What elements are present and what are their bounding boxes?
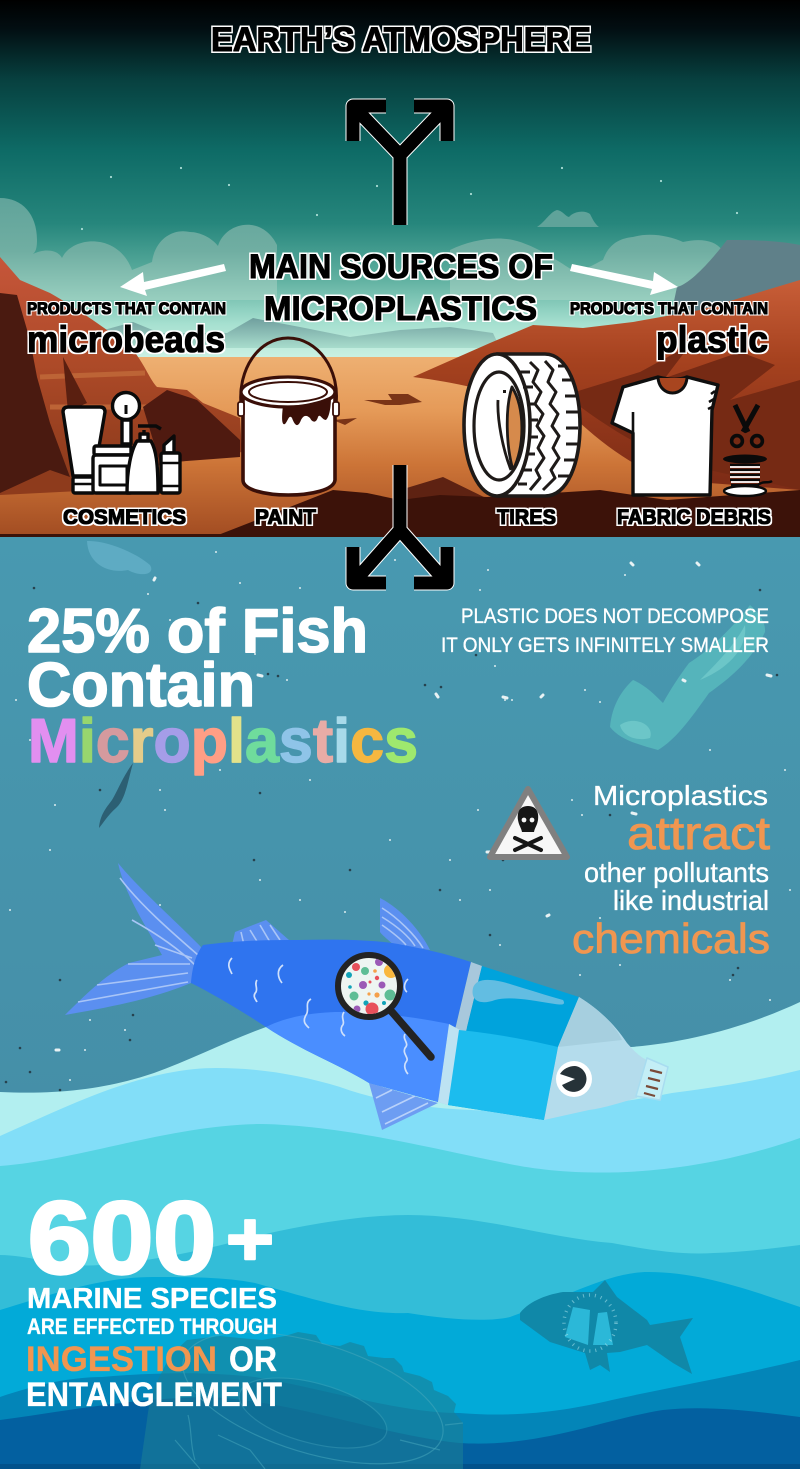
submerged lower body xyxy=(266,1012,449,1102)
heading: main sources of microplastics: MAIN SOURCES OF xyxy=(249,248,553,286)
panel: ocean background xyxy=(0,537,800,1469)
foreground mid layer xyxy=(400,477,490,500)
stat: 25% of fish contain microplastics: 25% of Fish xyxy=(27,597,368,666)
illustration: sunken tire silhouette xyxy=(140,1306,463,1469)
foreground dark xyxy=(213,490,800,537)
panel: atmosphere landscape background xyxy=(0,0,800,537)
illustration: fish made from plastic bottle xyxy=(65,863,668,1130)
right mountain xyxy=(413,280,800,490)
bottle cap xyxy=(636,1058,668,1100)
label: tires: TIRES xyxy=(497,506,556,529)
plastic fragment top left xyxy=(87,541,151,574)
scales xyxy=(229,958,408,1074)
large light flecks xyxy=(56,563,771,1050)
stat: 25% of fish contain microplastics: Microplastics xyxy=(28,707,418,776)
deep water wave xyxy=(0,1360,800,1469)
arrow: right to plastic xyxy=(570,264,678,295)
text block: plastic does not decompose: PLASTIC DOES NOT DECOMPOSE xyxy=(461,605,769,628)
text block: microplastics attract pollutants: like industrial xyxy=(613,885,769,916)
belly fin xyxy=(369,1083,438,1130)
bottle label xyxy=(448,966,579,1120)
label: cosmetics: COSMETICS xyxy=(63,506,186,529)
grey mountain right xyxy=(670,240,800,320)
stat: 25% of fish contain microplastics: Contain xyxy=(27,651,255,720)
clouds xyxy=(0,198,722,300)
dorsal fin front xyxy=(232,920,289,945)
icon: t-shirt xyxy=(612,377,718,495)
text block: plastic does not decompose xyxy=(441,605,769,657)
text block: products that contain microbeads xyxy=(27,299,226,360)
illustration: fish silhouette with plastic inside xyxy=(520,1280,693,1374)
teal water wave xyxy=(0,1215,800,1469)
arrow: left to microbeads xyxy=(120,264,226,296)
distant mountains xyxy=(90,318,500,348)
stat: 600+ marine species: 600 xyxy=(28,1181,216,1295)
stars xyxy=(82,168,737,229)
light microplastic specks xyxy=(10,552,790,1080)
dark microplastic specks xyxy=(6,588,777,1090)
fish body xyxy=(191,940,471,1102)
left mountain xyxy=(0,257,242,495)
text block: microplastics attract pollutants xyxy=(572,780,770,962)
text block: products that contain microbeads: microbeads xyxy=(27,319,225,360)
stat: 600+ marine species: ARE EFFECTED THROUGH xyxy=(27,1314,277,1339)
icon: scissors xyxy=(732,405,762,446)
left dark cliff xyxy=(0,293,70,493)
sea debris streak xyxy=(99,763,133,828)
stat: 600+ marine species: OR xyxy=(229,1340,277,1379)
bottle neck band xyxy=(438,962,482,1105)
bottle head xyxy=(544,997,647,1120)
text block: products that contain plastic: plastic xyxy=(656,319,768,360)
label: fabric debris: FABRIC DEBRIS xyxy=(617,506,771,529)
stat: 600+ marine species: MARINE SPECIES xyxy=(27,1283,277,1315)
text block: microplastics attract pollutants: Microplastics xyxy=(593,780,768,811)
light blue water wave xyxy=(0,1068,800,1469)
stat: 25% of fish contain microplastics xyxy=(27,597,418,776)
magnifying glass showing microplastics xyxy=(338,955,431,1057)
blue water wave xyxy=(0,1272,800,1469)
icon: cosmetics xyxy=(63,392,180,493)
left narrow cleft xyxy=(63,357,87,412)
title: Earth's Atmosphere: EARTH’S ATMOSPHERE xyxy=(211,21,591,59)
stat: 600+ marine species: INGESTION xyxy=(26,1340,217,1379)
fish eye xyxy=(556,1061,592,1097)
text block: microplastics attract pollutants: other pollutants xyxy=(584,857,769,888)
arrow: up to atmosphere xyxy=(353,106,447,225)
turquoise water wave xyxy=(0,1124,800,1469)
left mid shadow xyxy=(143,390,240,463)
text block: plastic does not decompose: IT ONLY GETS INFINITELY SMALLER xyxy=(441,634,769,657)
label: paint: PAINT xyxy=(255,506,316,529)
icon: thread spool xyxy=(723,454,772,496)
left mountain strata xyxy=(40,373,160,407)
text block: products that contain plastic: PRODUCTS THAT CONTAIN xyxy=(570,299,768,318)
stat: 600+ marine species: ENTANGLEMENT xyxy=(26,1376,282,1414)
right mountain shadow xyxy=(565,345,800,490)
label highlight xyxy=(473,980,564,1005)
ground streak xyxy=(333,394,422,425)
stat: 600+ marine species xyxy=(26,1181,282,1414)
text block: microplastics attract pollutants: attract xyxy=(627,807,770,859)
dorsal fin rear xyxy=(380,898,430,950)
seafoam water wave xyxy=(0,1002,800,1469)
sand plain xyxy=(0,357,800,537)
deepest water wave xyxy=(0,1397,800,1469)
heading: main sources of microplastics: MICROPLASTICS xyxy=(264,290,537,328)
icon: toxic warning triangle xyxy=(490,789,567,857)
text block: products that contain plastic xyxy=(570,299,768,360)
text block: products that contain microbeads: PRODUCTS THAT CONTAIN xyxy=(27,299,226,318)
stat: 600+ marine species: + xyxy=(226,1197,274,1282)
icon: tire xyxy=(464,354,580,496)
text block: microplastics attract pollutants: chemicals xyxy=(572,915,770,962)
icon: paint can xyxy=(238,338,339,495)
tail fin xyxy=(65,863,201,1015)
arrow: down to ocean xyxy=(353,465,447,583)
small distant cloud xyxy=(537,210,599,227)
plastic bag xyxy=(610,605,765,750)
heading: main sources of microplastics xyxy=(249,248,553,328)
